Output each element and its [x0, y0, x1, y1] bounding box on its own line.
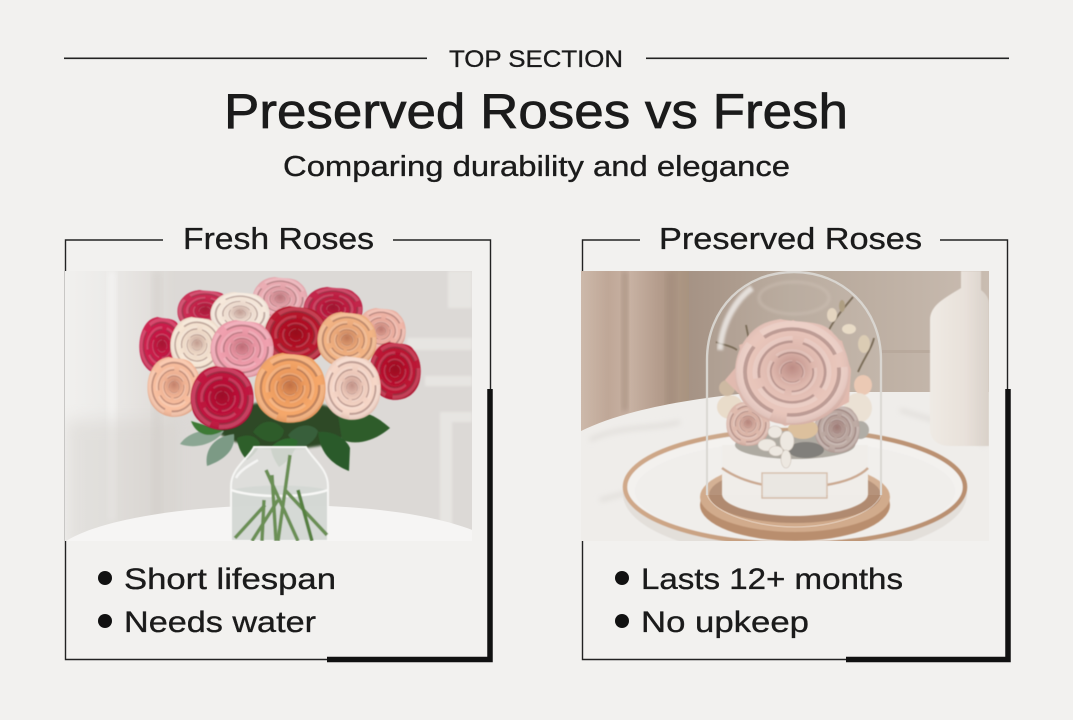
ceramic vase — [930, 271, 989, 446]
bullet list: fresh roses — [98, 563, 336, 639]
sprigs — [716, 297, 874, 459]
dark foliage behind roses — [219, 401, 342, 450]
title: Preserved Roses vs Fresh — [224, 85, 848, 139]
rose heads — [138, 276, 422, 431]
subtitle: Comparing durability and elegance — [283, 151, 790, 183]
leaves — [180, 412, 390, 471]
bullet: no upkeep: No upkeep — [641, 606, 809, 639]
panel heading: preserved roses: Preserved Roses — [659, 221, 922, 256]
glass dome — [707, 272, 881, 527]
photo: preserved rose under a glass dome — [581, 271, 989, 558]
panel heading: fresh roses: Fresh Roses — [183, 221, 374, 256]
gold base — [699, 474, 891, 541]
bullet: needs water: Needs water — [124, 606, 316, 639]
header — [64, 46, 1009, 183]
bullet list: preserved roses — [615, 563, 903, 639]
photo: bouquet of fresh roses in a glass vase — [65, 271, 475, 550]
curtain — [581, 271, 689, 441]
curtain — [65, 271, 158, 541]
table — [66, 505, 475, 541]
bullet: lasts 12+ months: Lasts 12+ months — [641, 563, 903, 596]
bullet: short lifespan: Short lifespan — [124, 563, 336, 596]
section label with rules: TOP SECTION — [449, 46, 623, 73]
panel frame: fresh roses — [66, 240, 490, 660]
wall rail — [888, 350, 930, 353]
large rose — [725, 318, 852, 426]
panel: fresh roses — [65, 221, 490, 660]
white box — [721, 462, 870, 517]
small roses and flower — [726, 402, 860, 468]
wall moulding — [407, 271, 472, 530]
marble table — [581, 392, 989, 541]
panel frame: preserved roses — [582, 240, 1008, 660]
glass vase — [231, 447, 328, 541]
panel: preserved roses — [581, 221, 1008, 660]
tray — [622, 427, 968, 541]
